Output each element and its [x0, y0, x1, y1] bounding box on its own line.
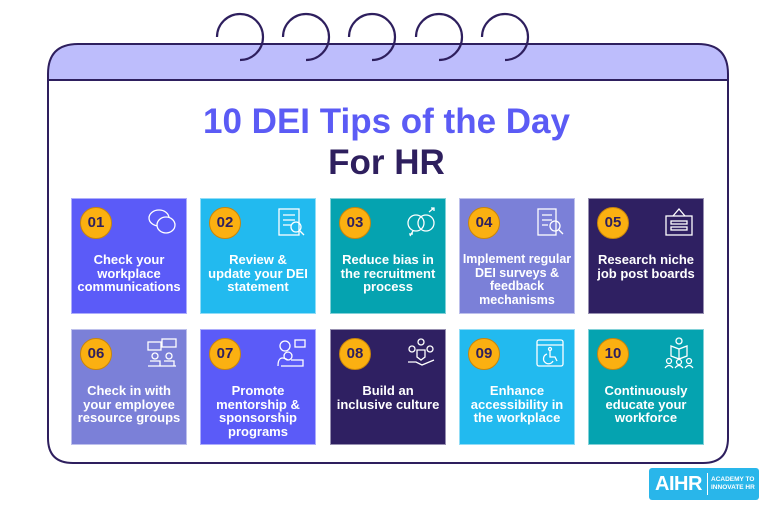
card 07: Promote — [232, 383, 284, 398]
card 09: the workplace — [474, 410, 560, 425]
card 03: Reduce bias in — [342, 252, 434, 267]
card 04: 04 — [476, 214, 492, 231]
card 07: 07 — [217, 345, 233, 362]
card 10: educate your — [606, 397, 686, 412]
logo: ACADEMY TO — [711, 476, 754, 483]
card 09: 09 — [476, 345, 492, 362]
logo — [649, 468, 759, 500]
card 04 — [459, 198, 575, 314]
card 02: Review & — [229, 252, 287, 267]
card 07: mentorship & — [216, 397, 300, 412]
card 08: 08 — [347, 345, 363, 362]
card 02: update your DEI — [208, 266, 308, 281]
card 08: Build an — [362, 383, 414, 398]
card 06: your employee — [83, 397, 175, 412]
card 09: Enhance — [490, 383, 544, 398]
card 07: sponsorship — [219, 410, 297, 425]
title: 10 DEI Tips of the Day — [203, 102, 570, 141]
card 01: workplace — [97, 266, 161, 281]
card 06: resource groups — [78, 410, 180, 425]
card 02 — [200, 198, 316, 314]
card 01: 01 — [88, 214, 104, 231]
card 04: DEI surveys & — [475, 266, 559, 280]
card 08: inclusive culture — [337, 397, 439, 412]
card 04: feedback — [490, 279, 544, 293]
card 01: communications — [77, 279, 181, 294]
card 07: programs — [228, 424, 288, 439]
card 04: Implement regular — [463, 252, 571, 266]
card 09: accessibility in — [471, 397, 563, 412]
card 08 — [330, 329, 446, 445]
subtitle: For HR — [328, 143, 445, 182]
card 06: Check in with — [87, 383, 171, 398]
card 10: Continuously — [604, 383, 688, 398]
card 05: 05 — [605, 214, 621, 231]
card 10 — [588, 329, 704, 445]
card 02: 02 — [217, 214, 233, 231]
card 03: process — [363, 279, 413, 294]
card 04: mechanisms — [479, 293, 555, 307]
card 01 — [71, 198, 187, 314]
card 03: the recruitment — [341, 266, 435, 281]
card 02: statement — [227, 279, 289, 294]
logo: INNOVATE HR — [711, 484, 755, 491]
card 03: 03 — [347, 214, 363, 231]
card 06: 06 — [88, 345, 104, 362]
card 10: 10 — [605, 345, 621, 362]
card 05 — [588, 198, 704, 314]
card 06 — [71, 329, 187, 445]
card 09 — [459, 329, 575, 445]
card 05: job post boards — [597, 266, 695, 281]
card 07 — [200, 329, 316, 445]
card 01: Check your — [94, 252, 164, 267]
logo: AIHR — [655, 473, 702, 495]
card 10: workforce — [615, 410, 677, 425]
card 05: Research niche — [598, 252, 694, 267]
card 03 — [330, 198, 446, 314]
